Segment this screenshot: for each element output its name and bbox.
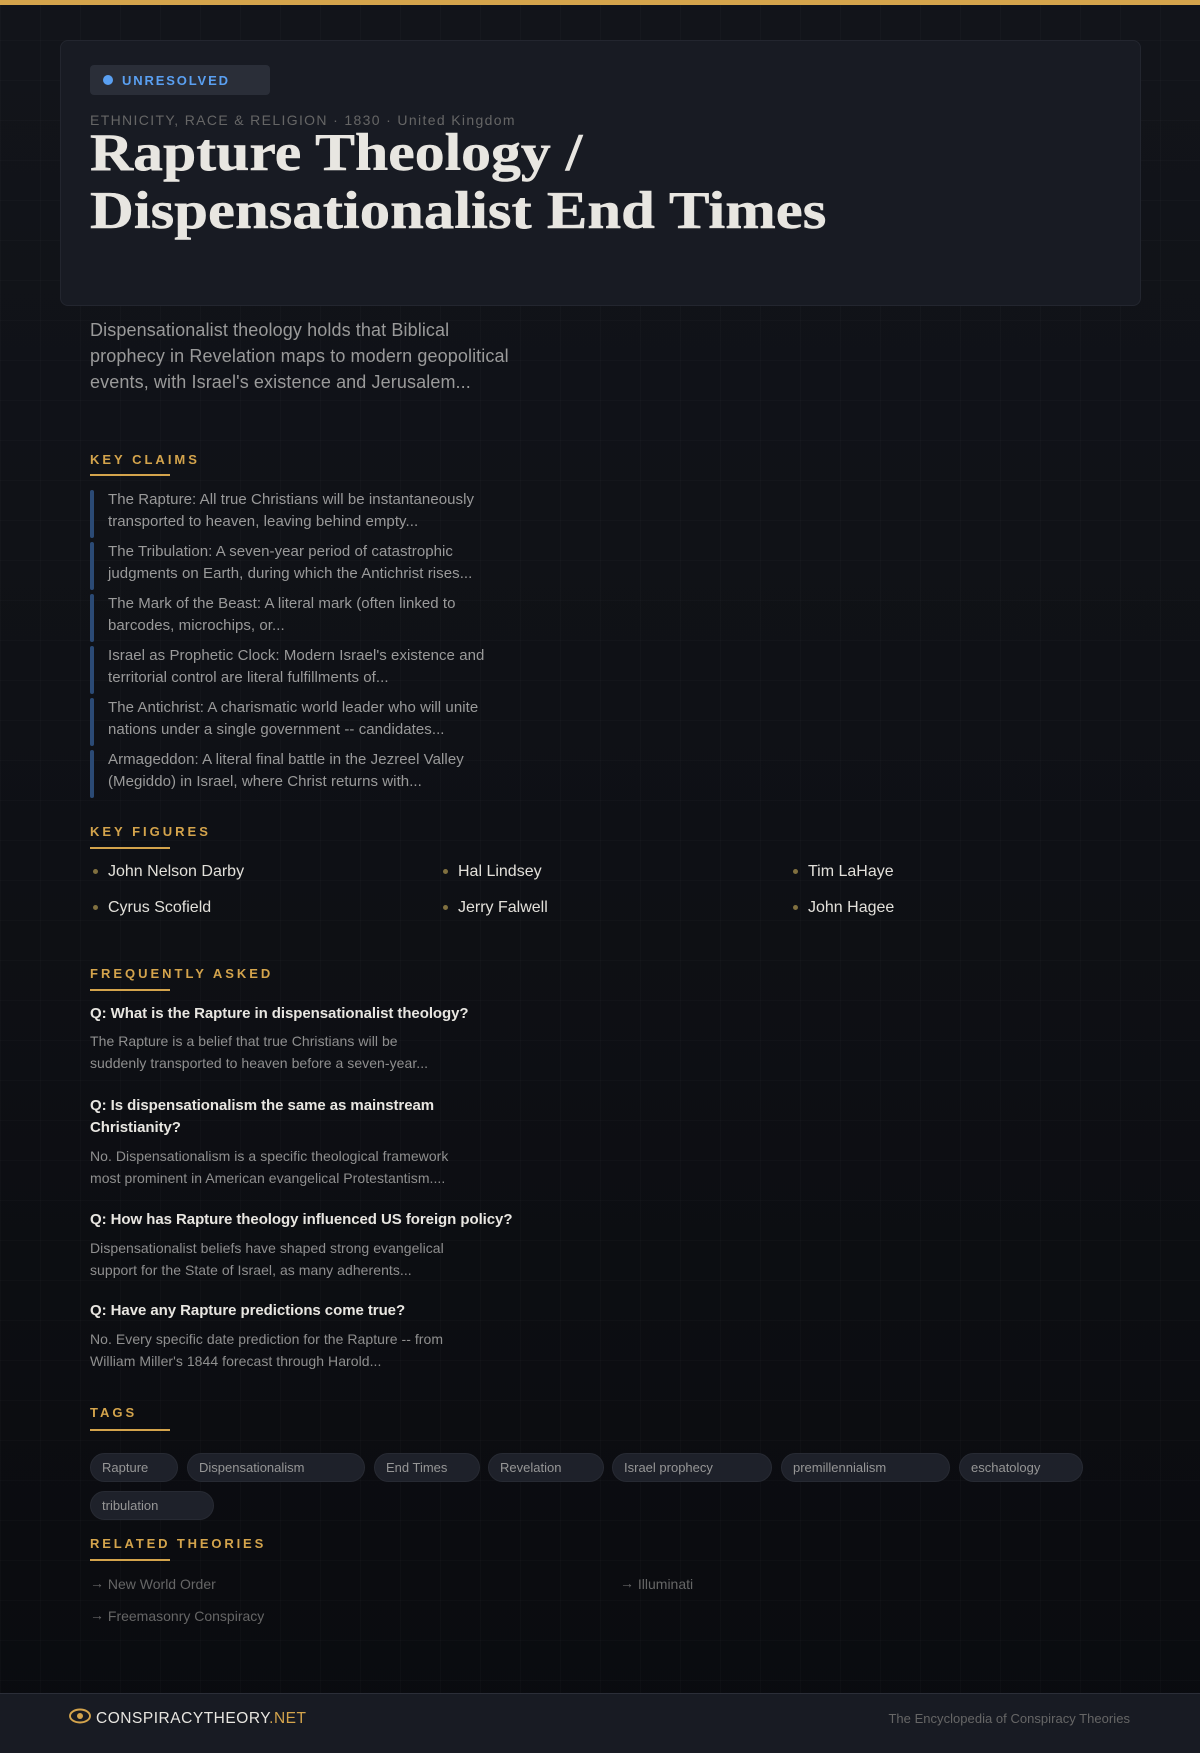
claim 5 bbox=[90, 698, 478, 746]
intro text bbox=[90, 320, 509, 392]
tag: tribulation bbox=[90, 1491, 214, 1520]
related links bbox=[90, 1575, 693, 1624]
link: Freemasonry Conspiracy: → Freemasonry Conspiracy bbox=[90, 1607, 264, 1624]
faq 3 bbox=[90, 1211, 512, 1278]
claim 6: Armageddon: A literal final battle in the Jezreel Valley bbox=[108, 751, 464, 768]
link: New World Order: → New World Order bbox=[90, 1575, 216, 1592]
badge label: UNRESOLVED bbox=[122, 73, 230, 88]
logo wordmark: CONSPIRACYTHEORY.NET bbox=[96, 1710, 307, 1727]
tag cloud bbox=[90, 1453, 1083, 1520]
faq 2: Christianity? bbox=[90, 1119, 181, 1136]
faq 2: Q: Is dispensationalism the same as mainstream bbox=[90, 1097, 434, 1114]
figure: Cyrus Scofield: Cyrus Scofield bbox=[108, 899, 211, 916]
faq 1: Q: What is the Rapture in dispensationalist theology? bbox=[90, 1005, 469, 1022]
tag: End Times: End Times bbox=[386, 1460, 447, 1475]
icon: eye logo bbox=[69, 1708, 91, 1724]
tag: Revelation bbox=[488, 1453, 604, 1482]
title: Dispensationalist End Times bbox=[90, 182, 826, 240]
claim 3 bbox=[90, 594, 456, 642]
claim 4: Israel as Prophetic Clock: Modern Israel's existence and bbox=[108, 647, 484, 664]
figure: John Hagee: John Hagee bbox=[808, 899, 894, 916]
figure: Hal Lindsey: Hal Lindsey bbox=[458, 863, 542, 880]
status badge: unresolved bbox=[90, 65, 270, 95]
faq 4: No. Every specific date prediction for the Rapture -- from bbox=[90, 1331, 443, 1347]
footer tagline: The Encyclopedia of Conspiracy Theories bbox=[888, 1711, 1130, 1726]
faq 3: support for the State of Israel, as many adherents... bbox=[90, 1262, 412, 1278]
heading: frequently asked: FREQUENTLY ASKED bbox=[90, 966, 273, 981]
claim 1: The Rapture: All true Christians will be instantaneously bbox=[108, 491, 474, 508]
claim 1: transported to heaven, leaving behind empty... bbox=[108, 513, 418, 530]
tag: eschatology bbox=[959, 1453, 1083, 1482]
heading: tags: TAGS bbox=[90, 1405, 137, 1420]
panel: hero header bbox=[60, 40, 1141, 306]
claim 3: The Mark of the Beast: A literal mark (often linked to bbox=[108, 595, 456, 612]
intro text: Dispensationalist theology holds that Biblical bbox=[90, 320, 449, 340]
panel: key figures bbox=[93, 863, 894, 916]
faq 3: Dispensationalist beliefs have shaped strong evangelical bbox=[90, 1240, 444, 1256]
title: Rapture Theology / bbox=[90, 124, 582, 182]
tag: Rapture bbox=[90, 1453, 178, 1482]
badge dot bbox=[103, 75, 113, 85]
heading: related theories: RELATED THEORIES bbox=[90, 1536, 266, 1551]
faq 1: The Rapture is a belief that true Christians will be bbox=[90, 1033, 398, 1049]
faq 2: No. Dispensationalism is a specific theological framework bbox=[90, 1148, 448, 1164]
intro text: prophecy in Revelation maps to modern geopolitical bbox=[90, 346, 509, 366]
tag: End Times bbox=[374, 1453, 480, 1482]
tag: Revelation: Revelation bbox=[500, 1460, 561, 1475]
tag: premillennialism bbox=[781, 1453, 950, 1482]
claim 4: territorial control are literal fulfillments of... bbox=[108, 669, 389, 686]
faq 2 bbox=[90, 1097, 448, 1186]
figure: John Nelson Darby: John Nelson Darby bbox=[108, 863, 244, 880]
tag: premillennialism: premillennialism bbox=[793, 1460, 886, 1475]
tag: Israel prophecy bbox=[612, 1453, 772, 1482]
figure: Jerry Falwell: Jerry Falwell bbox=[458, 899, 548, 916]
faq 4: Q: Have any Rapture predictions come true? bbox=[90, 1302, 405, 1319]
meta line: ETHNICITY, RACE & RELIGION · 1830 · United Kingdom bbox=[90, 112, 516, 128]
faq 4: William Miller's 1844 forecast through Harold... bbox=[90, 1352, 381, 1368]
claim 2 bbox=[90, 542, 472, 590]
claim 1 bbox=[90, 490, 474, 538]
faq 4 bbox=[90, 1302, 443, 1369]
heading: key figures: KEY FIGURES bbox=[90, 824, 211, 839]
tag: Israel prophecy: Israel prophecy bbox=[624, 1460, 713, 1475]
intro text: events, with Israel's existence and Jerusalem... bbox=[90, 372, 471, 392]
figure: Tim LaHaye: Tim LaHaye bbox=[808, 863, 894, 880]
link: Illuminati: → Illuminati bbox=[620, 1575, 693, 1592]
tag: Rapture: Rapture bbox=[102, 1460, 148, 1475]
faq 1: suddenly transported to heaven before a seven-year... bbox=[90, 1054, 428, 1070]
claim 3: barcodes, microchips, or... bbox=[108, 617, 285, 634]
heading: key claims: KEY CLAIMS bbox=[90, 452, 200, 467]
footer bbox=[0, 1693, 1200, 1753]
claim 5: The Antichrist: A charismatic world leader who will unite bbox=[108, 699, 478, 716]
tag: Dispensationalism bbox=[187, 1453, 365, 1482]
panel: key claims list bbox=[90, 490, 484, 798]
claim 6: (Megiddo) in Israel, where Christ returns with... bbox=[108, 773, 422, 790]
faq 3: Q: How has Rapture theology influenced US foreign policy? bbox=[90, 1211, 512, 1228]
title bbox=[90, 124, 826, 240]
faq 2: most prominent in American evangelical Protestantism.... bbox=[90, 1170, 445, 1186]
tag: tribulation: tribulation bbox=[102, 1498, 158, 1513]
tag: eschatology: eschatology bbox=[971, 1460, 1040, 1475]
tag: Dispensationalism: Dispensationalism bbox=[199, 1460, 304, 1475]
claim 6 bbox=[90, 750, 464, 798]
faq 1 bbox=[90, 1005, 469, 1071]
claim 5: nations under a single government -- candidates... bbox=[108, 721, 445, 738]
claim 2: judgments on Earth, during which the Antichrist rises... bbox=[108, 565, 472, 582]
claim 4 bbox=[90, 646, 484, 694]
claim 2: The Tribulation: A seven-year period of catastrophic bbox=[108, 543, 453, 560]
top accent bar bbox=[0, 0, 1200, 5]
